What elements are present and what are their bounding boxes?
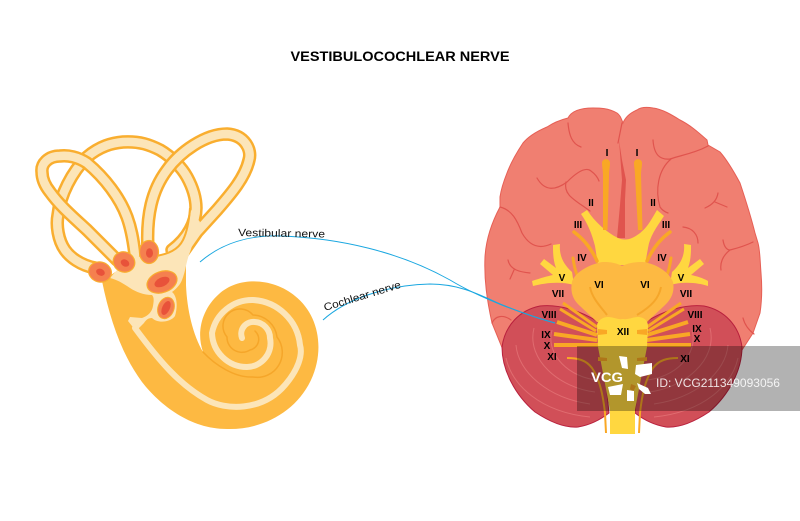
cerebellum right bbox=[635, 306, 742, 427]
watermark logo bbox=[591, 356, 652, 401]
nerve labels: II bbox=[588, 198, 594, 209]
watermark band bbox=[577, 346, 800, 411]
inner ear illustration bbox=[42, 134, 318, 429]
medulla bbox=[597, 317, 648, 434]
label: vestibular nerve: Vestibular nerve bbox=[238, 227, 325, 241]
central fissure bbox=[617, 140, 626, 238]
semicircular canal: posterior loop bbox=[42, 156, 135, 260]
cerebellum left bbox=[502, 306, 609, 427]
label: cochlear nerve: Cochlear nerve bbox=[322, 279, 403, 314]
cerebrum bbox=[485, 107, 762, 350]
title: VESTIBULOCOCHLEAR NERVE bbox=[290, 49, 510, 64]
nerve labels: VI bbox=[640, 280, 650, 291]
cranial nerve roots bbox=[554, 287, 691, 433]
nerve labels: XI bbox=[680, 354, 690, 365]
nerve labels: II bbox=[650, 198, 656, 209]
ampulla 1 bbox=[86, 259, 114, 285]
medulla nerve marks bbox=[598, 329, 647, 392]
nerve labels: III bbox=[574, 220, 582, 231]
olfactory nerve right bbox=[634, 159, 642, 230]
optic chiasm and tract bbox=[581, 210, 664, 265]
saccule bbox=[155, 295, 177, 321]
nerve labels: I bbox=[606, 148, 609, 159]
nerve labels: IX bbox=[541, 330, 551, 341]
nerve labels: VIII bbox=[541, 310, 557, 321]
utricle bbox=[144, 267, 180, 297]
nerve labels: V bbox=[678, 273, 685, 284]
semicircular canal: anterior arch bbox=[57, 142, 196, 268]
nerve labels bbox=[541, 148, 703, 365]
cochlea body bbox=[102, 262, 318, 429]
watermark id: ID: VCG211349093056 bbox=[656, 378, 780, 390]
cochlear nerve line bbox=[323, 284, 555, 323]
nerve labels: III bbox=[662, 220, 670, 231]
cerebellum folia bbox=[506, 328, 738, 417]
nerve labels: XII bbox=[617, 327, 629, 338]
nerve labels: VIII bbox=[687, 310, 703, 321]
vestibule bbox=[110, 210, 200, 331]
olfactory nerve left bbox=[602, 159, 610, 230]
vestibular nerve line bbox=[200, 236, 555, 323]
brain folds bbox=[492, 123, 754, 334]
nerve labels: IV bbox=[657, 253, 667, 264]
nerve labels: IV bbox=[577, 253, 587, 264]
nerve labels: IX bbox=[692, 324, 702, 335]
trigeminal nerve right bbox=[670, 244, 708, 286]
trigeminal nerve left bbox=[532, 244, 574, 286]
cochlear inner line bbox=[203, 309, 282, 377]
ampulla 3 bbox=[140, 240, 158, 264]
nerve labels: VI bbox=[594, 280, 604, 291]
cochlear spiral duct bbox=[135, 300, 301, 407]
vestibule edge bbox=[156, 208, 190, 256]
semicircular canal: lateral loop bbox=[148, 134, 250, 252]
nerve labels: XI bbox=[547, 352, 557, 363]
ampulla 2 bbox=[110, 248, 138, 276]
nerve labels: X bbox=[544, 341, 551, 352]
nerve labels: I bbox=[636, 148, 639, 159]
nerve labels: VII bbox=[680, 289, 692, 300]
watermark logo: VCG bbox=[591, 370, 623, 385]
oculomotor and trochlear nerves bbox=[573, 232, 671, 275]
pons bbox=[571, 262, 674, 322]
nerve labels: V bbox=[559, 273, 566, 284]
nerve labels: X bbox=[694, 334, 701, 345]
nerve labels: VII bbox=[552, 289, 564, 300]
